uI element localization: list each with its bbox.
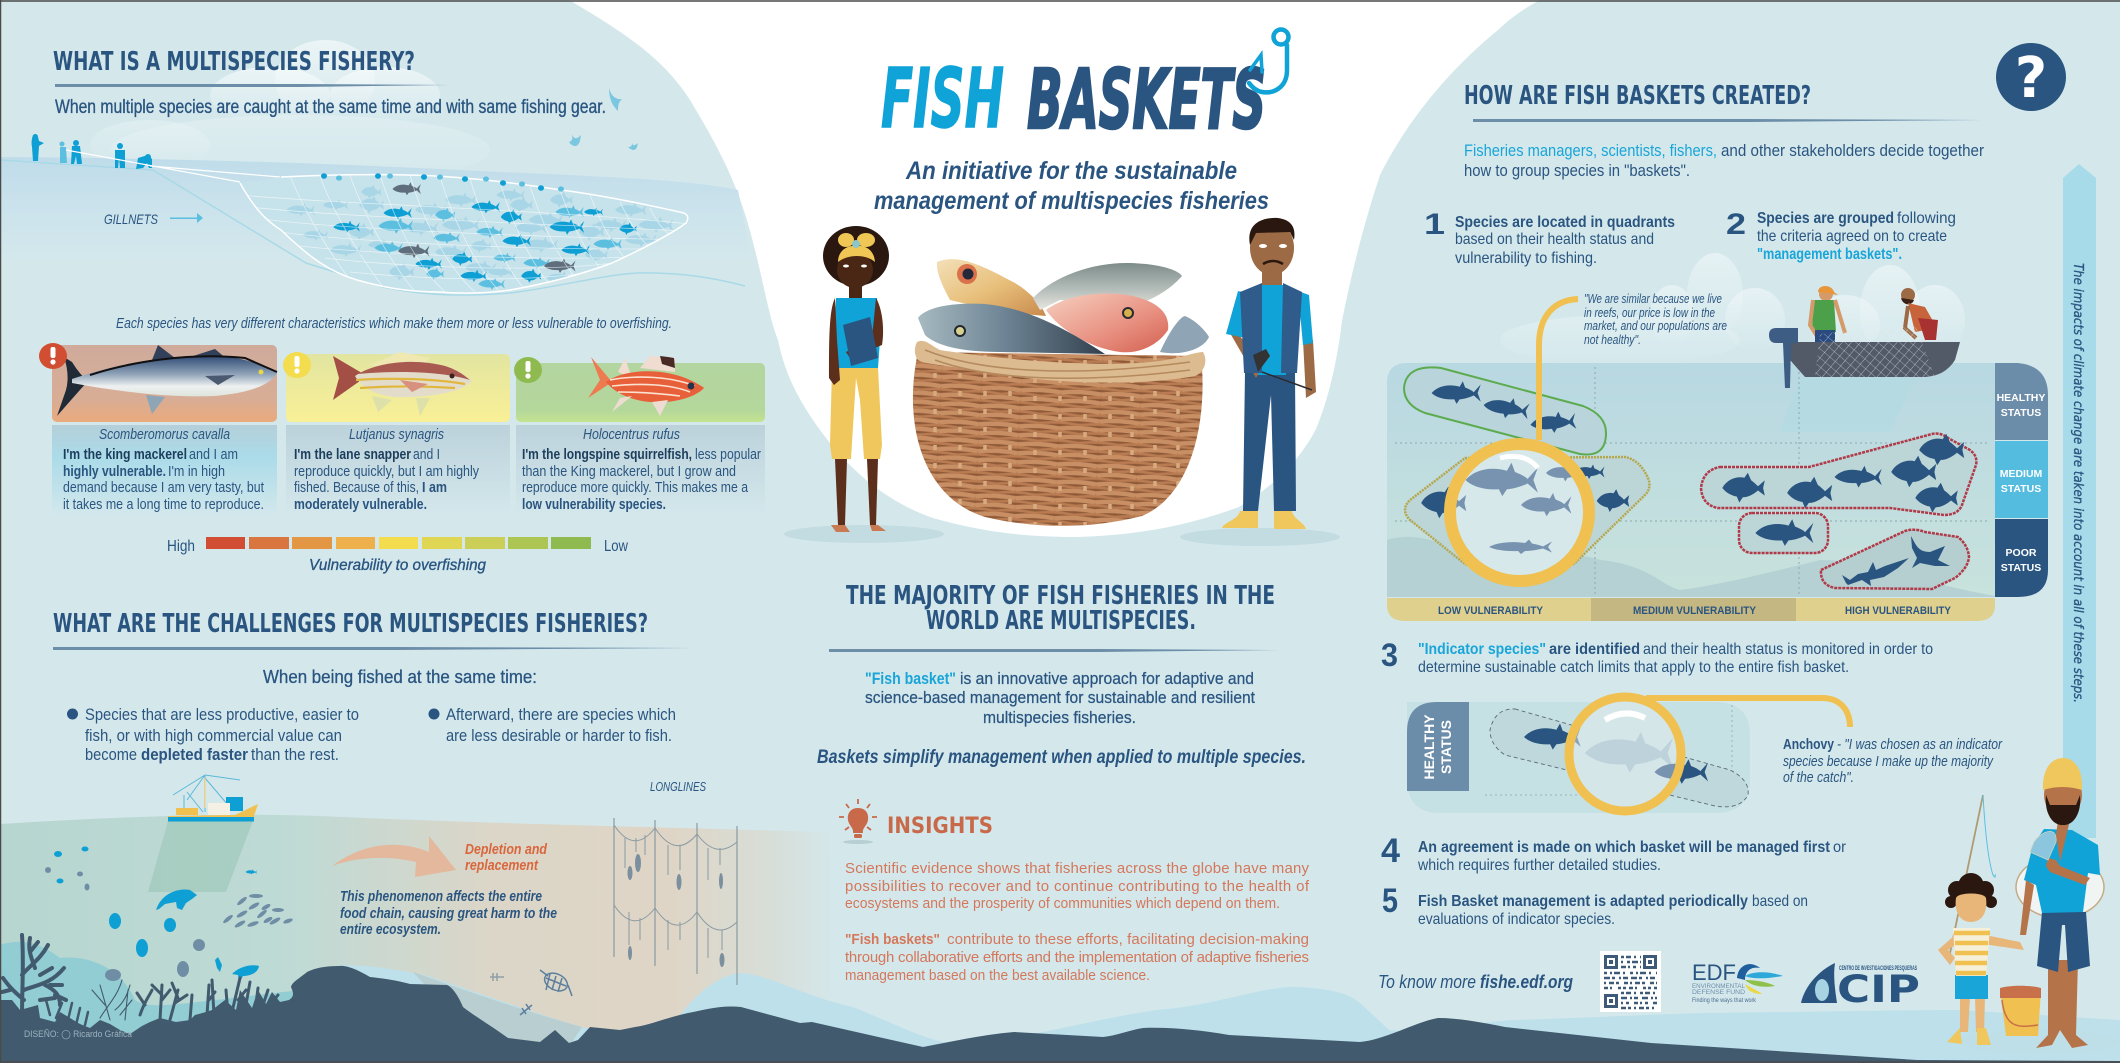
boy head [1956,894,1986,922]
phone and rod [1253,349,1270,372]
paragraph two [845,931,1309,984]
step 5 [1382,882,1808,928]
man beard [2046,795,2080,825]
man net [2016,856,2104,918]
trousers [830,368,882,459]
depletion label: replacement [465,857,539,874]
blue fish [333,200,637,283]
food chain text: entire ecosystem. [340,921,441,938]
illustration: fishers on boat [1769,286,1960,388]
step 1 [1424,208,1675,267]
description: highly vulnerable. [63,463,166,480]
step 5: evaluations of indicator species. [1418,911,1615,928]
boy shoes [1947,1028,1991,1045]
anchovy quote: species because I make up the majority [1783,753,1994,770]
card: king mackerel [52,345,277,517]
faint fish [286,185,673,284]
introduction: how to group species in "baskets". [1464,161,1690,180]
outboard motor [1769,328,1798,388]
icon: fish hook [1249,30,1288,92]
introduction [1464,141,1984,180]
status axis [1995,363,2048,597]
red group: long [1701,434,1976,515]
lens: species quote [1421,299,1590,582]
step 4 [1381,832,1847,874]
status tab label: STATUS [1438,720,1454,774]
arm right [846,298,883,358]
neck [849,280,862,300]
title [881,30,1288,148]
fish: blue left [1524,724,1581,750]
word baskets: BASKETS [1027,53,1266,148]
panel: challenges [53,609,695,764]
man neck [2056,820,2070,862]
man net on shoulder [2030,831,2056,860]
red group: shark and ray [1821,530,1969,589]
step 2: following [1897,210,1956,227]
step 5: based on [1752,893,1808,910]
grid lines [1395,367,1990,595]
description: than the King mackerel, but I grow and [522,463,736,480]
subtitle: management of multispecies fisheries [874,187,1269,215]
illustration: woman with clipboard [823,226,889,532]
indicator species diagram [1407,697,2003,813]
step 3: and their health status is monitored in order to [1643,641,1933,658]
paragraph two: management based on the best available science. [845,967,1150,984]
status tab [1407,702,1469,791]
coral silhouettes [2,935,278,1025]
step 2: "management baskets". [1757,246,1902,263]
food chain text [340,888,557,938]
heading: WHAT ARE THE CHALLENGES FOR MULTISPECIES FISHERIES? [53,609,648,639]
QR code [1600,951,1661,1012]
scale swatches [206,537,591,549]
fish: blue eye [955,326,965,336]
illustration: father and son [1938,758,2120,1054]
lens [1564,692,1686,816]
step 4: An agreement is made on which basket will be managed first [1418,839,1831,856]
step 3: determine sustainable catch limits that apply to the entire fish basket. [1418,659,1849,676]
olive group pill [1405,457,1649,567]
card text background [516,425,765,517]
illustration: king mackerel [57,345,277,416]
man legs [2036,960,2088,1048]
depletion label: Depletion and [465,841,548,858]
scale caption: Vulnerability to overfishing [309,557,486,574]
step 1: vulnerability to fishing. [1455,250,1597,267]
step 2: 2 [1726,208,1746,241]
status axis: STATUS [2001,483,2041,495]
step 2 [1726,208,1956,263]
description: demand because I am very tasty, but [63,479,265,496]
longlines label: LONGLINES [650,779,706,794]
step 1: based on their health status and [1455,231,1654,248]
ground shadow [1960,1030,2120,1054]
vest [1240,283,1302,373]
icon: medium risk badge [283,352,311,378]
paragraph two: contribute to these efforts, facilitating decision-making [947,931,1309,948]
hair [823,226,889,286]
seabed line [0,160,745,295]
vulnerability scale [167,537,628,574]
heading rule [1473,119,1983,122]
vulnerability intro: Each species has very different characteristics which make them more or less vulnerable to overfishing. [116,315,672,332]
paragraph one: ecosystems and the prosperity of communities which depend on them. [845,895,1280,912]
logo: EDF: Finding the ways that work [1692,998,1757,1004]
anchovy quote: - "I was chosen as an indicator [1837,736,2003,753]
bucket [2000,986,2041,1036]
more information link: fishe.edf.org [1480,972,1573,992]
logo: EDF: EDF [1692,960,1736,985]
water [0,815,840,1063]
bullet one [67,705,359,764]
feet [831,525,886,532]
latin name: Lutjanus synagris [349,426,444,443]
climate text: The impacts of climate change are taken into account in all of these steps. [2070,263,2085,703]
light hills [300,965,2120,1063]
logo: EDF [1692,960,1783,1004]
fish: grey [1033,263,1182,310]
paragraph one: Scientific evidence shows that fisheries across the globe have many [845,860,1310,877]
arrow: climate change [2063,164,2096,838]
boots [1222,511,1306,529]
quote: "We are similar because we live [1584,291,1722,306]
bullet two: are less desirable or harder to fish. [446,726,672,745]
paragraph one [845,860,1310,912]
heading [846,581,1275,636]
floats [321,173,544,191]
man left arm [2020,880,2034,935]
illustration: small blue fish and turtle [45,846,259,983]
description: low vulnerability species. [522,496,666,513]
step 2: the criteria agreed on to create [1757,228,1947,245]
heading: WORLD ARE MULTISPECIES. [926,606,1196,636]
step 4: or [1833,839,1847,856]
description: and I am [189,446,238,463]
face [837,252,873,288]
white central shape [569,0,1540,537]
status tab label [1421,714,1454,780]
card text background [52,425,277,517]
description: I'm the king mackerel [63,446,187,463]
boy hair [1945,873,1997,908]
illustration: lane snapper [333,352,472,416]
icon: high risk badge [39,343,67,369]
illustration: longspine squirrelfish [588,356,704,416]
boy shirt [1953,928,1990,976]
panel: species cards [39,343,765,517]
dashed basket [1490,709,1748,807]
basket rim [915,341,1205,383]
panel: seabed scene [0,775,2120,1063]
eyes [843,264,867,268]
panel: majority statement [817,581,1306,768]
green group pill [1404,367,1606,455]
hill tint [413,972,582,1045]
step 4: which requires further detailed studies. [1417,857,1661,874]
label high: High [167,538,195,555]
tagline: Baskets simplify management when applied to multiple species. [817,747,1306,768]
card image background [52,345,277,422]
description: and I [413,446,440,463]
man arm [2046,858,2090,885]
status axis: HEALTHY [1997,392,2045,404]
sleeves [1226,291,1313,345]
neck [1262,268,1282,288]
bullet one: become [85,745,137,764]
boy arms [1938,935,2024,965]
head [1250,221,1294,275]
mid blue fish [374,205,622,290]
lens handle [1646,698,1850,727]
subheading: When being fished at the same time: [263,667,537,687]
logo: CIP [1801,963,1920,1011]
food chain text: food chain, causing great harm to the [340,905,557,922]
clouds [1500,253,1965,365]
description: I'm the longspine squirrelfish, [522,446,692,463]
vulnerability axis [1387,598,1995,621]
arm left [829,298,840,385]
heading: WHAT IS A MULTISPECIES FISHERY? [53,47,415,77]
arrow: depletion [332,836,456,877]
grid lines [1485,705,1748,810]
step 1: Species are located in quadrants [1455,214,1675,231]
aqua coral mass [0,942,300,1040]
definition paragraph: "Fish basket" [865,669,956,688]
man shirt [2024,829,2100,913]
fading beam under boat [148,821,253,892]
anchovy quote: Anchovy [1783,736,1835,753]
net interior [248,176,684,292]
heading rule [53,647,695,650]
ropes [66,150,280,182]
paragraph one: possibilities to recover and to continue contributing to the health of [845,878,1310,895]
label low: Low [604,538,628,555]
icon: birds [569,88,638,150]
step 1: 1 [1424,208,1445,241]
fish: orange [937,259,1046,316]
definition sentence: When multiple species are caught at the same time and with same fishing gear. [55,97,606,118]
icon: question badge [1996,43,2066,111]
hull [1790,342,1960,377]
heading rule [55,84,450,87]
card image background [516,363,765,422]
quote: market, and our populations are [1584,318,1727,333]
quote [1584,291,1727,347]
description [294,446,479,513]
definition paragraph: science-based management for sustainable and resilient [865,688,1255,707]
vulnerability axis: HIGH VULNERABILITY [1845,605,1952,617]
shadows under the characters [784,525,1340,546]
designer credit: DISEÑO: ◯ Ricardo Gráfica [24,1029,132,1040]
illustration: fish school [222,894,293,929]
bullet two [428,705,676,745]
gillnets label: GILLNETS [104,211,159,227]
basket body [912,352,1203,526]
logo: EDF: DEFENSE FUND [1692,989,1745,996]
paragraph two: "Fish baskets" [845,931,940,948]
description [63,446,265,513]
bullet two: Afterward, there are species which [446,705,676,724]
step 3: are identified [1549,641,1640,658]
fishing line [1983,795,1995,877]
panel: how are fish baskets created [1378,43,2066,1012]
fish: blue right [1654,759,1708,784]
boy legs [1960,997,1985,1032]
shirt [1258,285,1286,375]
latin name: Holocentrus rufus [583,426,680,443]
paragraph two: through collaborative efforts and the implementation of adaptive fisheries [845,949,1309,966]
description: I'm the lane snapper [294,446,411,463]
subtitle [874,157,1269,215]
seabed inside chart [1387,537,1995,597]
fish in lens [1456,454,1572,554]
icon: low risk badge [514,357,542,383]
anchovy quote: of the catch". [1783,769,1854,786]
fishing rod [1949,795,1983,958]
eyes and moustache [1259,244,1287,264]
illustration: fishing boat [168,775,258,822]
legs [835,459,878,525]
description: it takes me a long time to reproduce. [63,496,264,513]
clipboard [843,317,878,366]
red group: single tuna [1739,513,1828,553]
bullet one: Species that are less productive, easier to [85,705,359,724]
description: moderately vulnerable. [294,496,427,513]
legs [1243,371,1296,511]
description: I'm in high [168,463,225,480]
step 5: Fish Basket management is adapted periodically [1418,893,1748,910]
hair [1249,218,1294,245]
top [832,298,880,368]
fish: red eye [1123,308,1133,318]
boy shorts [1955,975,1988,999]
diagram background [1407,702,1750,813]
icon: fishers on the shore [32,134,152,169]
sea surface [0,157,752,262]
beam under boat [1780,377,1916,432]
card: lane snapper [286,352,510,517]
fisher right [1901,288,1938,340]
quote: not healthy". [1584,332,1641,347]
heading: THE MAJORITY OF FISH FISHERIES IN THE [846,581,1275,611]
status axis: STATUS [2001,407,2041,419]
icon: question badge: ? [2015,46,2047,111]
description: less popular [695,446,761,463]
bullet one: fish, or with high commercial value can [85,726,342,745]
illustration: man with vest [1222,218,1316,529]
clouds behind title [90,40,490,185]
fish: small right [1160,316,1209,353]
illustration: fish bones and turtle skeleton [490,970,572,1015]
subtitle: An initiative for the sustainable [905,157,1237,185]
definition paragraph: is an innovative approach for adaptive and [960,669,1254,688]
status axis: MEDIUM [2000,468,2043,480]
card text background [286,425,510,517]
quote: in reefs, our price is low in the [1584,305,1715,320]
grey fish [392,182,576,273]
description: reproduce quickly, but I am highly [294,463,479,480]
description [522,446,761,513]
description: fished. Because of this, [294,479,419,496]
icon: light bulb [839,799,877,844]
introduction: Fisheries managers, scientists, fishers, [1464,141,1717,160]
panel: what is a multispecies fishery [0,40,752,332]
description: I am [422,479,447,496]
logo: EDF: ENVIRONMENTAL [1692,983,1745,990]
arms [1230,333,1316,398]
heading insights: INSIGHTS [887,814,993,839]
basket rim strands [925,350,1190,378]
card: longspine squirrelfish [516,356,765,517]
panel: insights [839,799,1310,984]
bullet one: than the rest. [251,745,339,764]
heading rule [829,649,1280,652]
net [1815,324,1935,377]
net mesh [240,175,700,292]
logo: CIP: CENTRO DE INVESTIGACIONES PESQUERAS [1839,966,1917,972]
headband [838,233,875,262]
definition paragraph [865,669,1255,727]
status tab label: HEALTHY [1421,714,1437,780]
step 2: Species are grouped [1757,210,1894,227]
fish: blue front [918,304,1105,354]
step 5: 5 [1382,882,1398,920]
dark seabed [0,966,2120,1063]
more information link: To know more [1378,972,1476,992]
man shorts [2037,912,2090,972]
introduction: and other stakeholders decide together [1721,141,1984,160]
step 3: 3 [1381,637,1398,673]
chart background [1387,363,1995,597]
net outline [240,175,688,293]
step 3 [1381,637,1933,676]
food chain text: This phenomenon affects the entire [340,888,542,905]
word fish: FISH [881,52,1004,147]
status axis: STATUS [2001,562,2041,574]
step 3: "Indicator species" [1418,641,1546,658]
bullet one: depleted faster [141,745,248,764]
definition paragraph: multispecies fisheries. [983,708,1136,727]
depletion label [465,841,548,874]
fish: red [1046,294,1168,352]
fish: orange eye [957,264,977,284]
illustration: longlines [614,818,737,985]
gillnet [240,173,688,294]
man hat [2043,758,2082,790]
man head [2044,773,2082,817]
logo: CIP: CIP [1837,968,1920,1011]
boy shirt stripes [1954,933,1990,973]
illustration: basket of fish [912,259,1209,526]
description: reproduce more quickly. This makes me a [522,479,749,496]
card image background [286,354,510,422]
vulnerability axis: MEDIUM VULNERABILITY [1633,605,1757,617]
vulnerability axis: LOW VULNERABILITY [1438,605,1544,617]
latin name: Scomberomorus cavalla [99,426,230,443]
status axis: POOR [2006,547,2037,559]
heading: HOW ARE FISH BASKETS CREATED? [1464,81,1811,111]
arrow: gillnets [170,213,203,223]
quadrant chart [1387,299,2048,621]
fisher left [1810,286,1845,342]
step 4: 4 [1381,832,1400,870]
anchovy quote [1783,736,2003,786]
more information link [1378,972,1573,992]
